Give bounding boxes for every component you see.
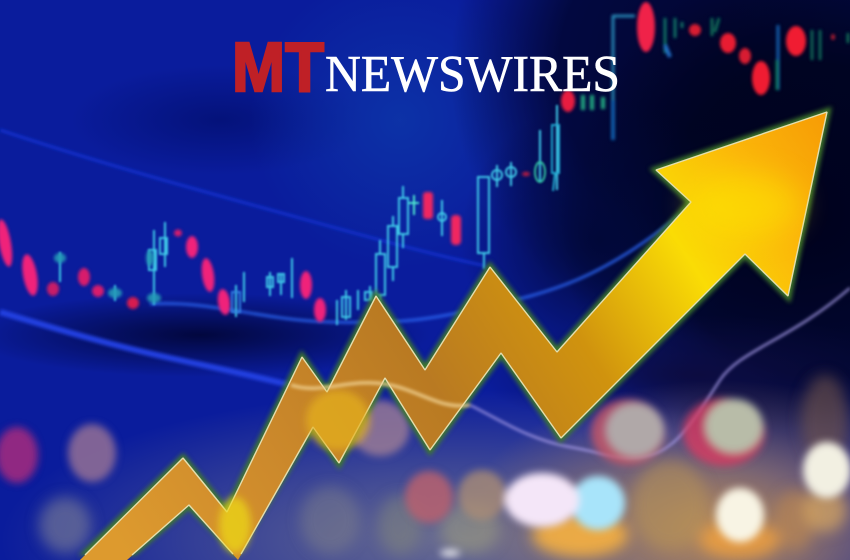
logo wordmark: NEWSWIRES: NEWSWIRES [325,46,620,103]
rising arrow [80,112,827,560]
candlestick chart: red candles [0,2,835,322]
logo mark: MT: MT [232,28,324,106]
bokeh lights: distinct discs [0,398,850,556]
candlestick chart: upper right ticks [583,15,848,140]
bokeh lights: soft background glows [39,375,849,558]
trend lines [0,130,850,458]
candlestick chart: left soft teal ticks [54,250,161,303]
candlestick chart: cyan candles [60,105,559,325]
logo: MT Newswires [232,28,620,106]
